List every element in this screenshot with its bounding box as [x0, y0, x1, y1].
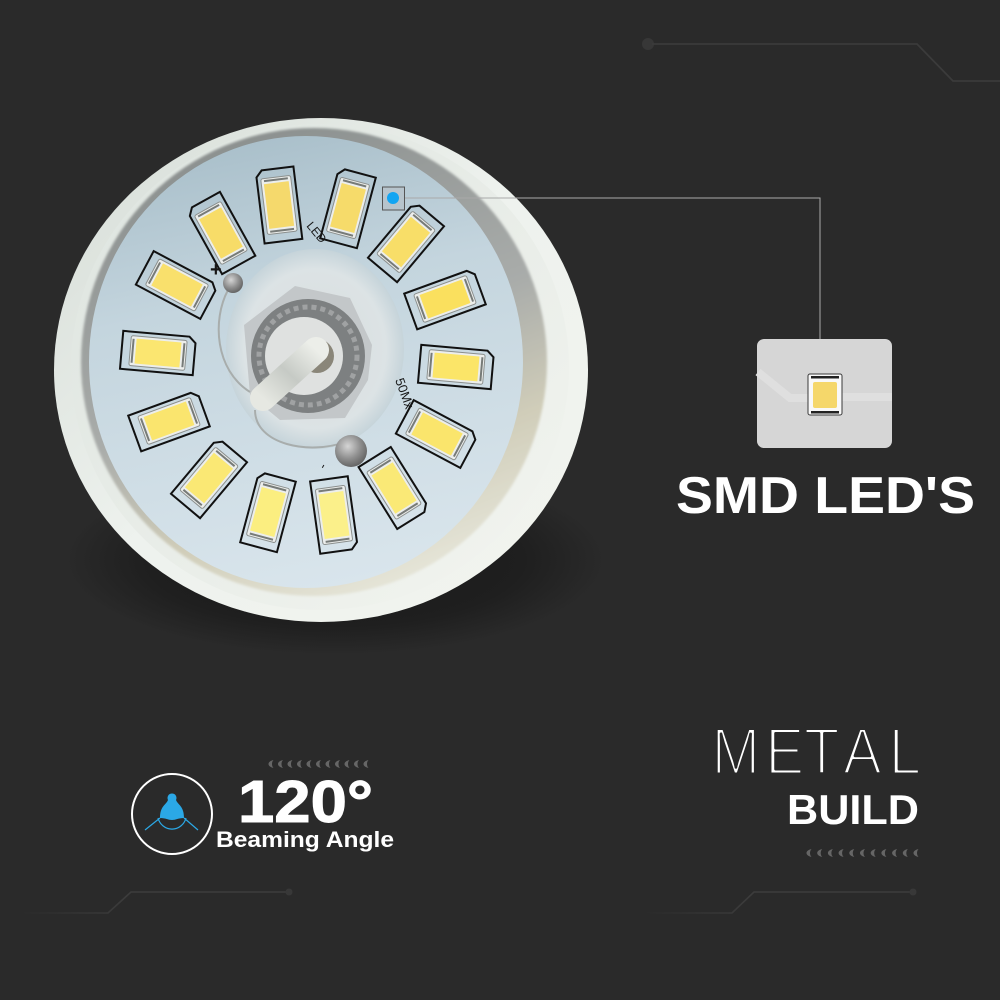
- circuit line bottom left: [20, 888, 292, 913]
- photo: LED bulb seen from above: [54, 118, 588, 622]
- bulb shadow: [65, 465, 605, 655]
- board marks: +: [210, 259, 222, 281]
- chevron row above 120 degrees: [268, 760, 368, 768]
- heading: METAL: METAL: [712, 716, 921, 789]
- bulb outer rim: [54, 118, 588, 622]
- board marks: 50Mx: [392, 376, 417, 411]
- thumbnail: SMD LED chip: [757, 339, 892, 448]
- circuit line bottom right: [644, 888, 916, 913]
- board marks: -: [315, 460, 330, 472]
- figure: 120 degrees: 120°: [238, 769, 373, 835]
- thin wires and solder balls: [219, 273, 367, 467]
- grey inner ring: [81, 128, 547, 596]
- callout connector line: [404, 198, 820, 340]
- bulb inner rim: [71, 124, 569, 610]
- chevron row under BUILD: [806, 849, 918, 857]
- board marks: LED: [304, 219, 330, 246]
- hub nut: [244, 286, 372, 420]
- circuit board: [89, 136, 523, 588]
- potted wire: [263, 350, 316, 398]
- LED ring: [120, 166, 494, 554]
- label: Beaming Angle: Beaming Angle: [216, 827, 394, 852]
- translucent hub: [226, 249, 404, 449]
- icon: beam angle: [132, 774, 212, 854]
- board marks: [210, 219, 417, 472]
- circuit line top right: [642, 38, 1000, 81]
- callout marker: [382, 187, 404, 210]
- heading: SMD LED'S: SMD LED'S: [676, 467, 975, 525]
- heading: BUILD: BUILD: [787, 786, 919, 833]
